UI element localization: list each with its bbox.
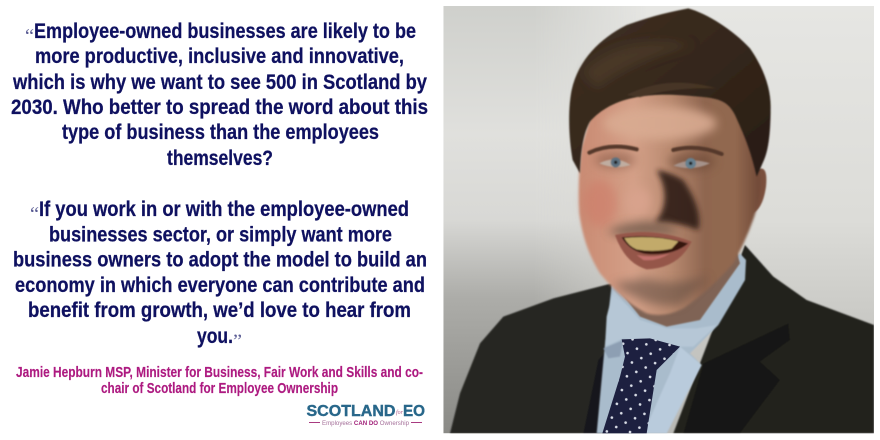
text block: first quote: type of business than the employees	[62, 121, 379, 144]
text block: second quote: benefit from growth, we’d love to hear from	[28, 299, 411, 322]
logo: Scotland for EO: SCOTLAND	[306, 403, 396, 420]
hair	[569, 8, 771, 177]
text block: second quote: business owners to adopt the model to build an	[13, 248, 427, 272]
shirt and collar	[597, 253, 746, 433]
photo: portrait of Jamie Hepburn	[443, 6, 874, 433]
logo: Scotland for EO: Employees CAN DO Ownership	[322, 421, 410, 427]
mouth with smile	[615, 232, 692, 269]
text block: first quote: more productive, inclusive and innovative,	[35, 45, 404, 68]
logo: Scotland for EO	[306, 403, 425, 427]
text block: first quote: themselves?	[167, 147, 273, 170]
text block: first quote: Employee-owned businesses are likely to be	[34, 20, 416, 43]
tie	[602, 338, 680, 433]
text block: second quote: “	[30, 204, 39, 225]
logo: Scotland for EO: for	[396, 409, 404, 416]
text block: second quote: you.	[197, 325, 233, 348]
attribution: Jamie Hepburn MSP, Minister for Business, Fair Work and Skills and co-	[16, 364, 423, 381]
text block: second quote: businesses sector, or simply want more	[49, 224, 392, 246]
text block: second quote: ”	[233, 331, 242, 352]
text block: first quote: 2030. Who better to spread the word about this	[11, 96, 428, 119]
logo: Scotland for EO: EO	[403, 403, 425, 420]
attribution: chair of Scotland for Employee Ownership	[101, 380, 338, 397]
attribution	[16, 364, 423, 397]
text block: first quote: which is why we want to see 500 in Scotland by	[12, 71, 427, 94]
text block: second quote	[13, 198, 427, 352]
face	[579, 83, 760, 315]
text block: second quote: economy in which everyone can contribute and	[15, 274, 425, 297]
eyes	[599, 157, 710, 169]
neck	[623, 253, 741, 328]
ear	[752, 169, 766, 213]
panel: quote text	[11, 20, 428, 352]
suit jacket	[450, 245, 874, 433]
eyebrows	[589, 147, 722, 154]
photo backdrop	[443, 6, 874, 433]
text block: second quote: If you work in or with the employee-owned	[39, 198, 409, 221]
text block: first quote: “	[25, 26, 34, 47]
text block: first quote	[11, 20, 428, 170]
